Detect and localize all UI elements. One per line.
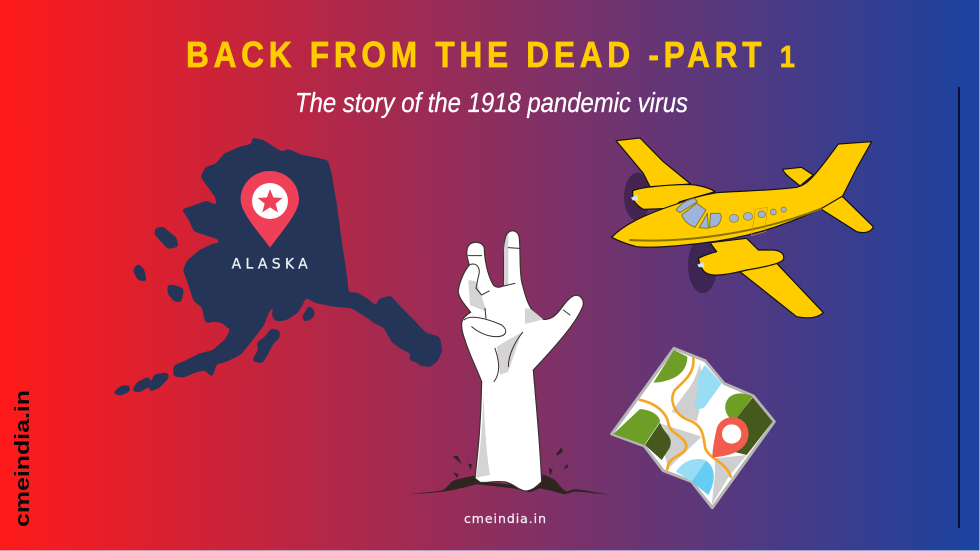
soil crack — [410, 474, 610, 495]
zombie hand rising from ground — [410, 231, 610, 495]
rear stabilisers — [783, 167, 813, 186]
cabin door — [752, 207, 767, 236]
map pin hole — [722, 424, 741, 444]
water — [695, 365, 722, 409]
dirt flecks — [453, 447, 568, 478]
location pin — [241, 171, 299, 248]
hand shading — [468, 233, 543, 478]
side brand text: cmeindia.in — [12, 390, 34, 527]
fuselage stripe — [629, 208, 822, 241]
cockpit windows — [676, 198, 721, 228]
far engine — [633, 185, 715, 209]
far wing — [616, 138, 691, 187]
subtitle: The story of the 1918 pandemic virus — [295, 87, 688, 118]
right vertical rule — [958, 87, 960, 528]
propeller spinners — [631, 195, 704, 268]
title: BACK FROM THE DEAD -PART 1 — [186, 35, 795, 75]
map pin — [712, 417, 749, 457]
Alaska landmass — [115, 139, 441, 394]
cabin windows — [729, 207, 786, 222]
fuselage and tail fin — [612, 142, 872, 247]
hand silhouette — [458, 231, 583, 491]
grey land — [660, 363, 747, 505]
bottom brand text: cmeindia.in — [464, 511, 546, 526]
near engine — [698, 238, 784, 275]
hand crease lines — [464, 248, 570, 382]
green map areas — [653, 350, 687, 383]
Alaska label: ALASKA — [232, 257, 308, 273]
orange roads — [640, 358, 731, 477]
folded map with pin — [612, 348, 774, 508]
map of Alaska with pin — [115, 139, 441, 394]
propeller discs — [624, 173, 717, 293]
near wing — [740, 263, 823, 318]
map sheet — [612, 348, 774, 508]
dark green map areas — [645, 423, 671, 460]
yellow airplane — [612, 138, 873, 318]
